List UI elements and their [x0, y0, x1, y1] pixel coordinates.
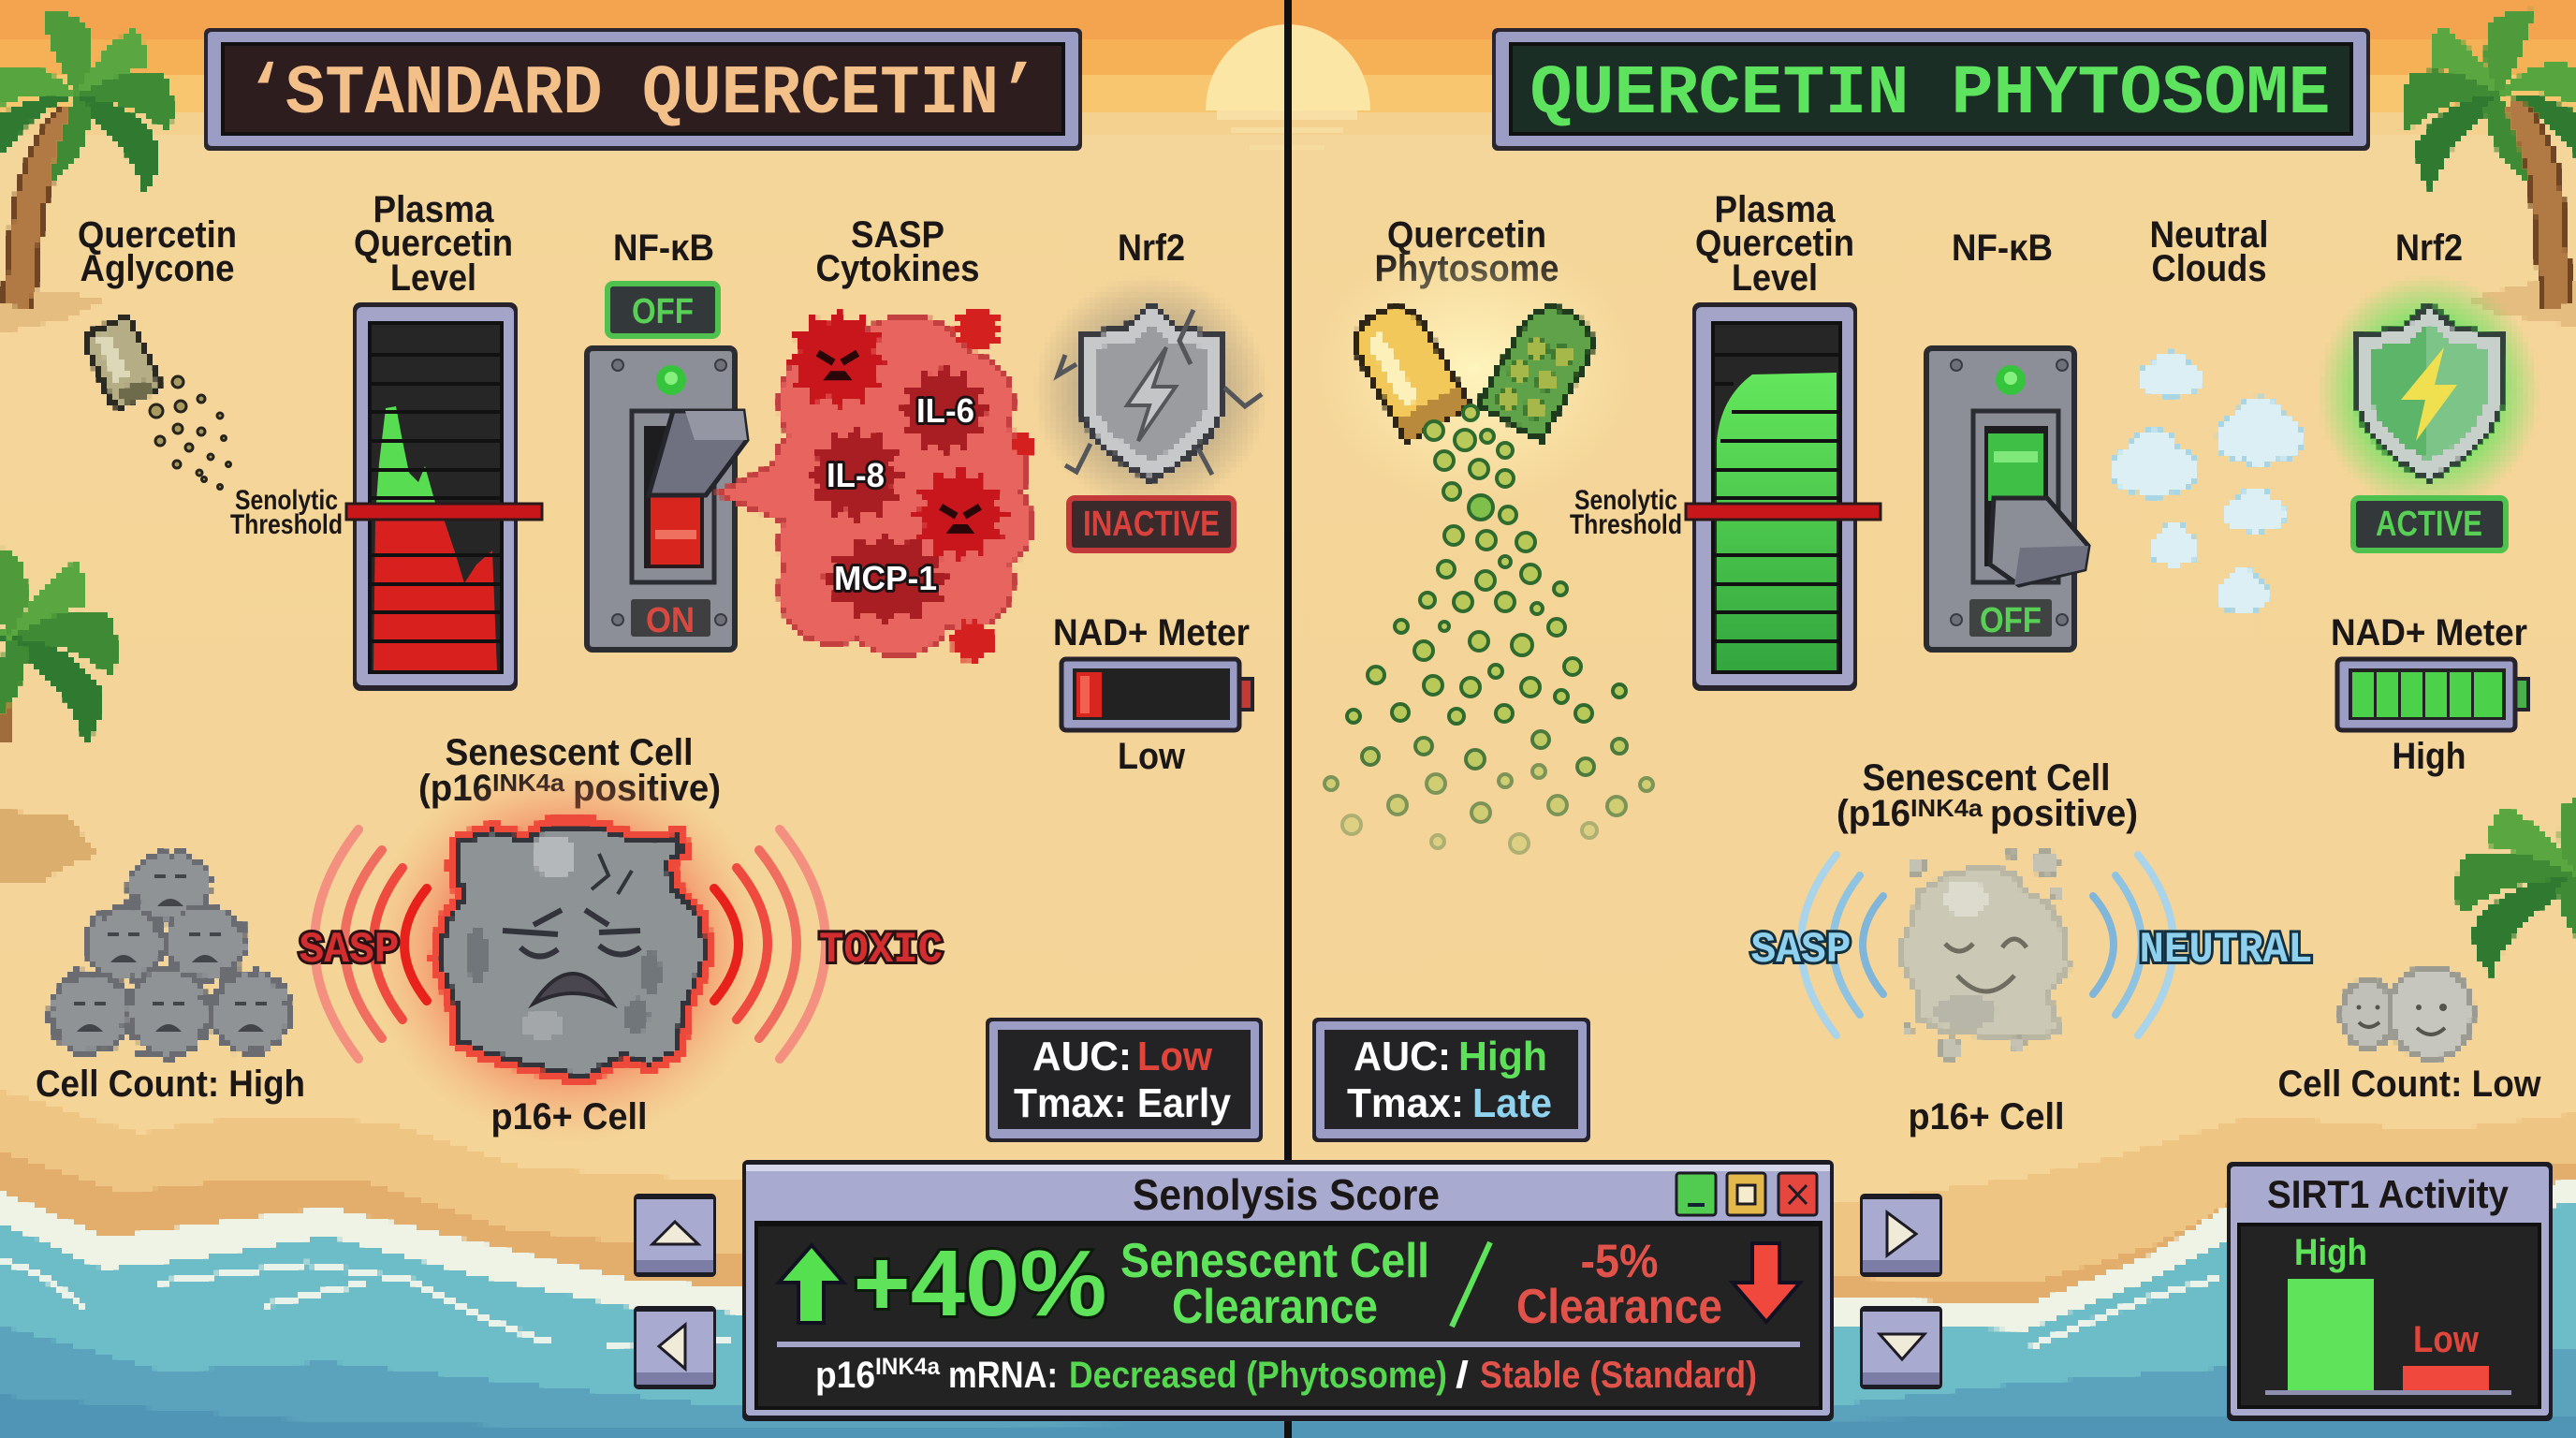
label: plasma quercetin level right: Level	[1732, 257, 1818, 299]
text: p16 mrna result: /	[1456, 1355, 1469, 1396]
cytokine: il-8	[807, 426, 904, 523]
icon: neutral clouds	[2113, 353, 2301, 613]
stat: -5% clearance: Clearance	[1516, 1280, 1722, 1334]
panel: quercetin phytosome	[1310, 28, 2541, 1142]
cytokine: mcp-1: MCP-1	[834, 559, 937, 597]
label: senescent cell standard: positive)	[573, 768, 721, 809]
icon: cell cluster high	[51, 853, 290, 1056]
switch: nf-kb on: ON	[646, 601, 695, 640]
stat: -5% clearance	[1516, 1235, 1722, 1334]
badge: inactive: INACTIVE	[1083, 505, 1220, 544]
icon: battery high	[2337, 659, 2528, 730]
bar: high	[2288, 1232, 2374, 1390]
label: sasp cytokines: Cytokines	[816, 248, 979, 289]
heading: standard quercetin: ‘STANDARD QUERCETIN’	[245, 55, 1039, 134]
bar: low	[2403, 1319, 2489, 1390]
label: senolytic threshold	[230, 485, 343, 540]
label: plasma quercetin level right: Plasma	[1715, 189, 1836, 230]
panel: auc standard: Tmax: Early	[1014, 1080, 1231, 1126]
badge: active	[2353, 498, 2506, 550]
label: nrf2 right: Nrf2	[2395, 227, 2463, 269]
stat: +40%: +40%	[854, 1231, 1106, 1336]
label: senescent cell phytosome: INK4a	[1910, 794, 1983, 822]
label: cell count low: Cell Count: Low	[2278, 1064, 2541, 1105]
switch: nf-kb off	[1926, 348, 2088, 650]
label: p16+ cell: p16+ Cell	[490, 1096, 648, 1137]
cytokine: il-6: IL-6	[916, 391, 974, 430]
switch: nf-kb on	[587, 348, 747, 650]
label: quercetin aglycone: Aglycone	[80, 248, 234, 289]
label: sasp cytokines	[816, 214, 979, 289]
label: nad low: Low	[1118, 736, 1186, 777]
label: nad high: High	[2393, 736, 2466, 777]
label: senescent cell clearance: Senescent Cell	[1120, 1234, 1429, 1288]
panel: auc standard: Low	[1137, 1034, 1213, 1079]
badge: active: ACTIVE	[2376, 505, 2482, 544]
label: quercetin phytosome column	[1374, 214, 1559, 289]
title: sirt1 activity: SIRT1 Activity	[2267, 1172, 2510, 1216]
text: p16 mrna result: INK4a	[875, 1354, 941, 1380]
slash divider	[1452, 1242, 1490, 1327]
panel: auc phytosome: Tmax:	[1347, 1080, 1464, 1126]
palm tree: top left	[0, 11, 172, 332]
label: senolytic threshold right: Senolytic	[1574, 485, 1677, 516]
title: senolysis score: Senolysis Score	[1133, 1170, 1440, 1219]
label: senescent cell phytosome	[1837, 757, 2138, 834]
label: neutral clouds	[2149, 214, 2269, 289]
icon: active shield	[2319, 275, 2539, 509]
icon: toxic senescent cell	[315, 758, 826, 1142]
arrow: down red	[1733, 1243, 1800, 1322]
label: senescent cell standard	[418, 732, 721, 809]
button: up	[634, 1194, 716, 1277]
label: plasma quercetin level right	[1695, 189, 1854, 299]
badge: off: OFF	[632, 292, 694, 331]
label: nad+ meter: NAD+ Meter	[1053, 612, 1250, 653]
label: senescent cell standard: INK4a	[492, 769, 565, 797]
panel: auc phytosome: High	[1458, 1034, 1547, 1079]
heading: standard quercetin	[204, 28, 1082, 151]
palm tree: top right	[2404, 9, 2576, 326]
text: p16 mrna result	[815, 1354, 1757, 1396]
label: sasp cytokines: SASP	[851, 214, 944, 256]
heading: quercetin phytosome	[1492, 28, 2370, 151]
label: senolytic threshold right: Threshold	[1570, 509, 1682, 540]
panel: standard quercetin	[36, 28, 1268, 1142]
label: neutral: NEUTRAL	[2140, 926, 2312, 975]
palm tree: lower right	[2456, 789, 2576, 976]
label: plasma quercetin level: Quercetin	[354, 223, 513, 264]
heading: quercetin phytosome: QUERCETIN PHYTOSOME	[1530, 55, 2331, 134]
icon: aglycone capsule with scattered particles	[82, 316, 230, 489]
icon: neutral senescent cell	[1801, 850, 2174, 1059]
window buttons	[1676, 1173, 1817, 1215]
badge: off	[607, 284, 718, 336]
label: senescent cell phytosome: Senescent Cell	[1863, 757, 2110, 799]
label: senescent cell clearance	[1120, 1234, 1429, 1334]
label: neutral clouds: Neutral	[2149, 214, 2269, 256]
button: right	[1860, 1194, 1942, 1277]
stat: -5% clearance: -5%	[1580, 1235, 1659, 1287]
text: p16 mrna result: Stable (Standard)	[1480, 1355, 1757, 1396]
label: plasma quercetin level right: Quercetin	[1695, 223, 1854, 264]
label: sasp red: SASP	[300, 926, 399, 975]
text: p16 mrna result: Decreased (Phytosome)	[1069, 1355, 1447, 1396]
label: nf-kb: NF-κB	[613, 227, 714, 269]
label: quercetin aglycone: Quercetin	[78, 214, 237, 256]
label: quercetin phytosome column: Phytosome	[1374, 248, 1559, 289]
label: senolytic threshold: Senolytic	[235, 485, 338, 516]
label: quercetin phytosome column: Quercetin	[1387, 214, 1546, 256]
label: plasma quercetin level: Plasma	[373, 189, 494, 230]
label: nf-kb right: NF-κB	[1952, 227, 2053, 269]
icon: cell pair low	[2342, 968, 2472, 1058]
panel: senolysis score	[742, 1160, 1834, 1421]
palm tree: middle left	[0, 544, 117, 745]
switch: nf-kb off: OFF	[1980, 601, 2042, 640]
label: nad+ meter right: NAD+ Meter	[2331, 612, 2527, 653]
icon: sasp cytokine cloud	[723, 304, 1038, 666]
cytokine: il-8: IL-8	[827, 456, 885, 494]
label: toxic: TOXIC	[819, 926, 943, 975]
chart: plasma gauge sustained	[1686, 302, 1881, 691]
bar: high: High	[2294, 1232, 2367, 1273]
label: senolytic threshold right	[1570, 485, 1682, 540]
panel: auc phytosome	[1312, 1018, 1590, 1142]
label: p16+ cell right: p16+ Cell	[1908, 1096, 2065, 1137]
label: senescent cell standard: Senescent Cell	[446, 732, 693, 773]
panel: auc standard: AUC:	[1032, 1034, 1132, 1079]
label: plasma quercetin level	[354, 189, 513, 299]
panel: auc standard	[986, 1018, 1263, 1142]
badge: inactive	[1069, 498, 1234, 550]
icon: inactive shield	[1034, 275, 1268, 509]
panel: auc phytosome: Late	[1472, 1080, 1552, 1126]
sad face	[503, 854, 640, 1004]
chart: plasma gauge spike and drop	[346, 302, 542, 691]
center divider	[1284, 0, 1292, 1438]
icon: battery low	[1061, 659, 1252, 730]
bar: low: Low	[2413, 1319, 2480, 1360]
icon: open phytosome capsule with particles	[1310, 229, 1653, 853]
label: quercetin aglycone	[78, 214, 237, 289]
label: plasma quercetin level: Level	[390, 257, 476, 299]
label: neutral clouds: Clouds	[2151, 248, 2267, 289]
label: senescent cell clearance: Clearance	[1172, 1280, 1378, 1334]
cytokine: il-6	[898, 363, 991, 457]
button: left	[634, 1306, 716, 1389]
text: p16 mrna result: mRNA:	[948, 1355, 1058, 1396]
cytokine: mcp-1	[818, 532, 953, 625]
label: senescent cell standard: (p16	[418, 768, 492, 809]
label: senolytic threshold: Threshold	[230, 509, 343, 540]
label: sasp blue: SASP	[1750, 926, 1852, 975]
label: cell count high: Cell Count: High	[36, 1064, 305, 1105]
panel: sirt1 activity	[2227, 1162, 2553, 1421]
text: p16 mrna result: p16	[815, 1355, 875, 1396]
label: nrf2: Nrf2	[1118, 227, 1185, 269]
label: senescent cell phytosome: (p16	[1837, 793, 1910, 834]
arrow: up green	[779, 1245, 843, 1323]
label: senescent cell phytosome: positive)	[1990, 793, 2138, 834]
panel: auc phytosome: AUC:	[1354, 1034, 1451, 1079]
button: down	[1860, 1306, 1942, 1389]
